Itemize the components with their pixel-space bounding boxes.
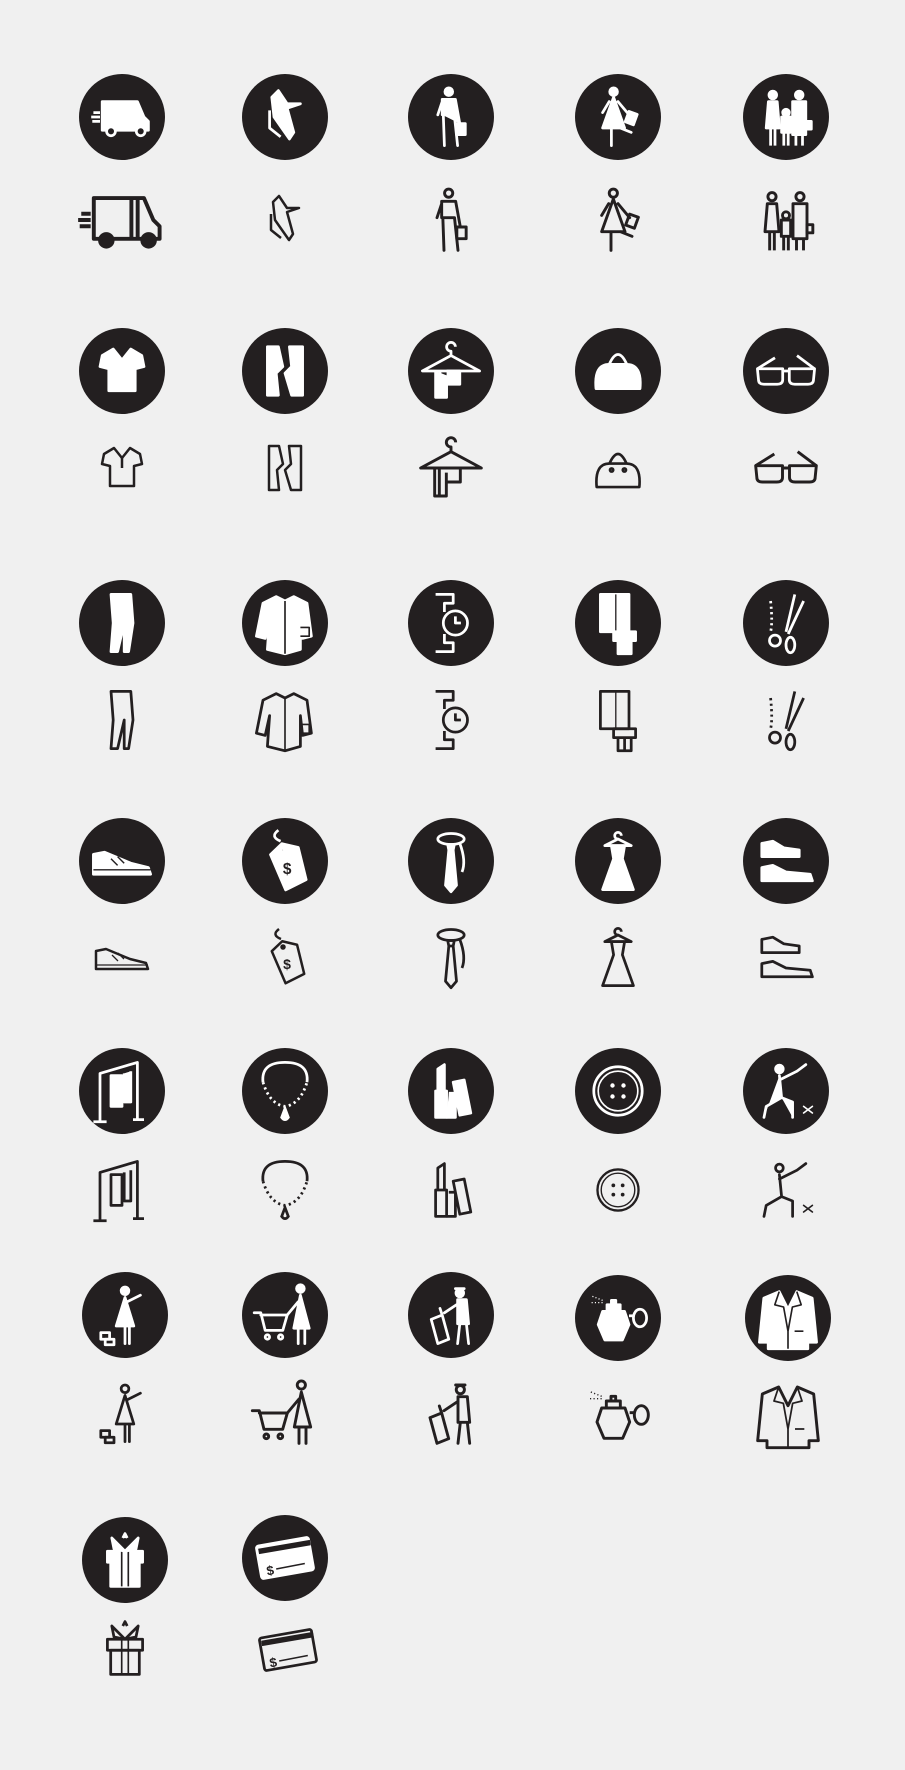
icon: sneaker (93, 852, 151, 969)
icon: woman shopping (602, 88, 638, 250)
icon: button (594, 1067, 642, 1211)
icon: gift (107, 1534, 143, 1674)
icon: blouse (100, 349, 144, 486)
icon: shirt (256, 597, 311, 751)
icon: clothes rack (93, 1062, 144, 1221)
icon: woman cleaning (101, 1287, 140, 1443)
icon: heels (270, 91, 300, 240)
circle badges (79, 74, 831, 1603)
icon: credit card (256, 1537, 317, 1671)
icon: truck (78, 102, 160, 247)
icon: pants (600, 594, 636, 751)
icon: handbag (596, 354, 640, 487)
icon: dress (603, 832, 633, 986)
icon: man shopping (437, 88, 466, 250)
icon: watch (436, 594, 468, 749)
icon: lipstick (436, 1065, 471, 1216)
icon: shopping cart (252, 1285, 311, 1443)
icon: glasses (756, 356, 816, 482)
icon: necklace (263, 1062, 307, 1219)
icon: jacket (758, 1292, 818, 1448)
icon: price tag (269, 830, 307, 985)
icon: hanger (421, 342, 481, 496)
icon: jeans (111, 594, 133, 749)
icon: needle and scissors (770, 594, 804, 750)
icon: tie (438, 834, 464, 988)
icon: family (765, 91, 813, 250)
icon: folded clothes (267, 347, 303, 490)
icon: shoes (762, 841, 812, 977)
icon: perfume (590, 1296, 648, 1438)
icon: tailor (764, 1065, 812, 1216)
icon: porter (430, 1289, 470, 1443)
icon grid (78, 74, 831, 1674)
